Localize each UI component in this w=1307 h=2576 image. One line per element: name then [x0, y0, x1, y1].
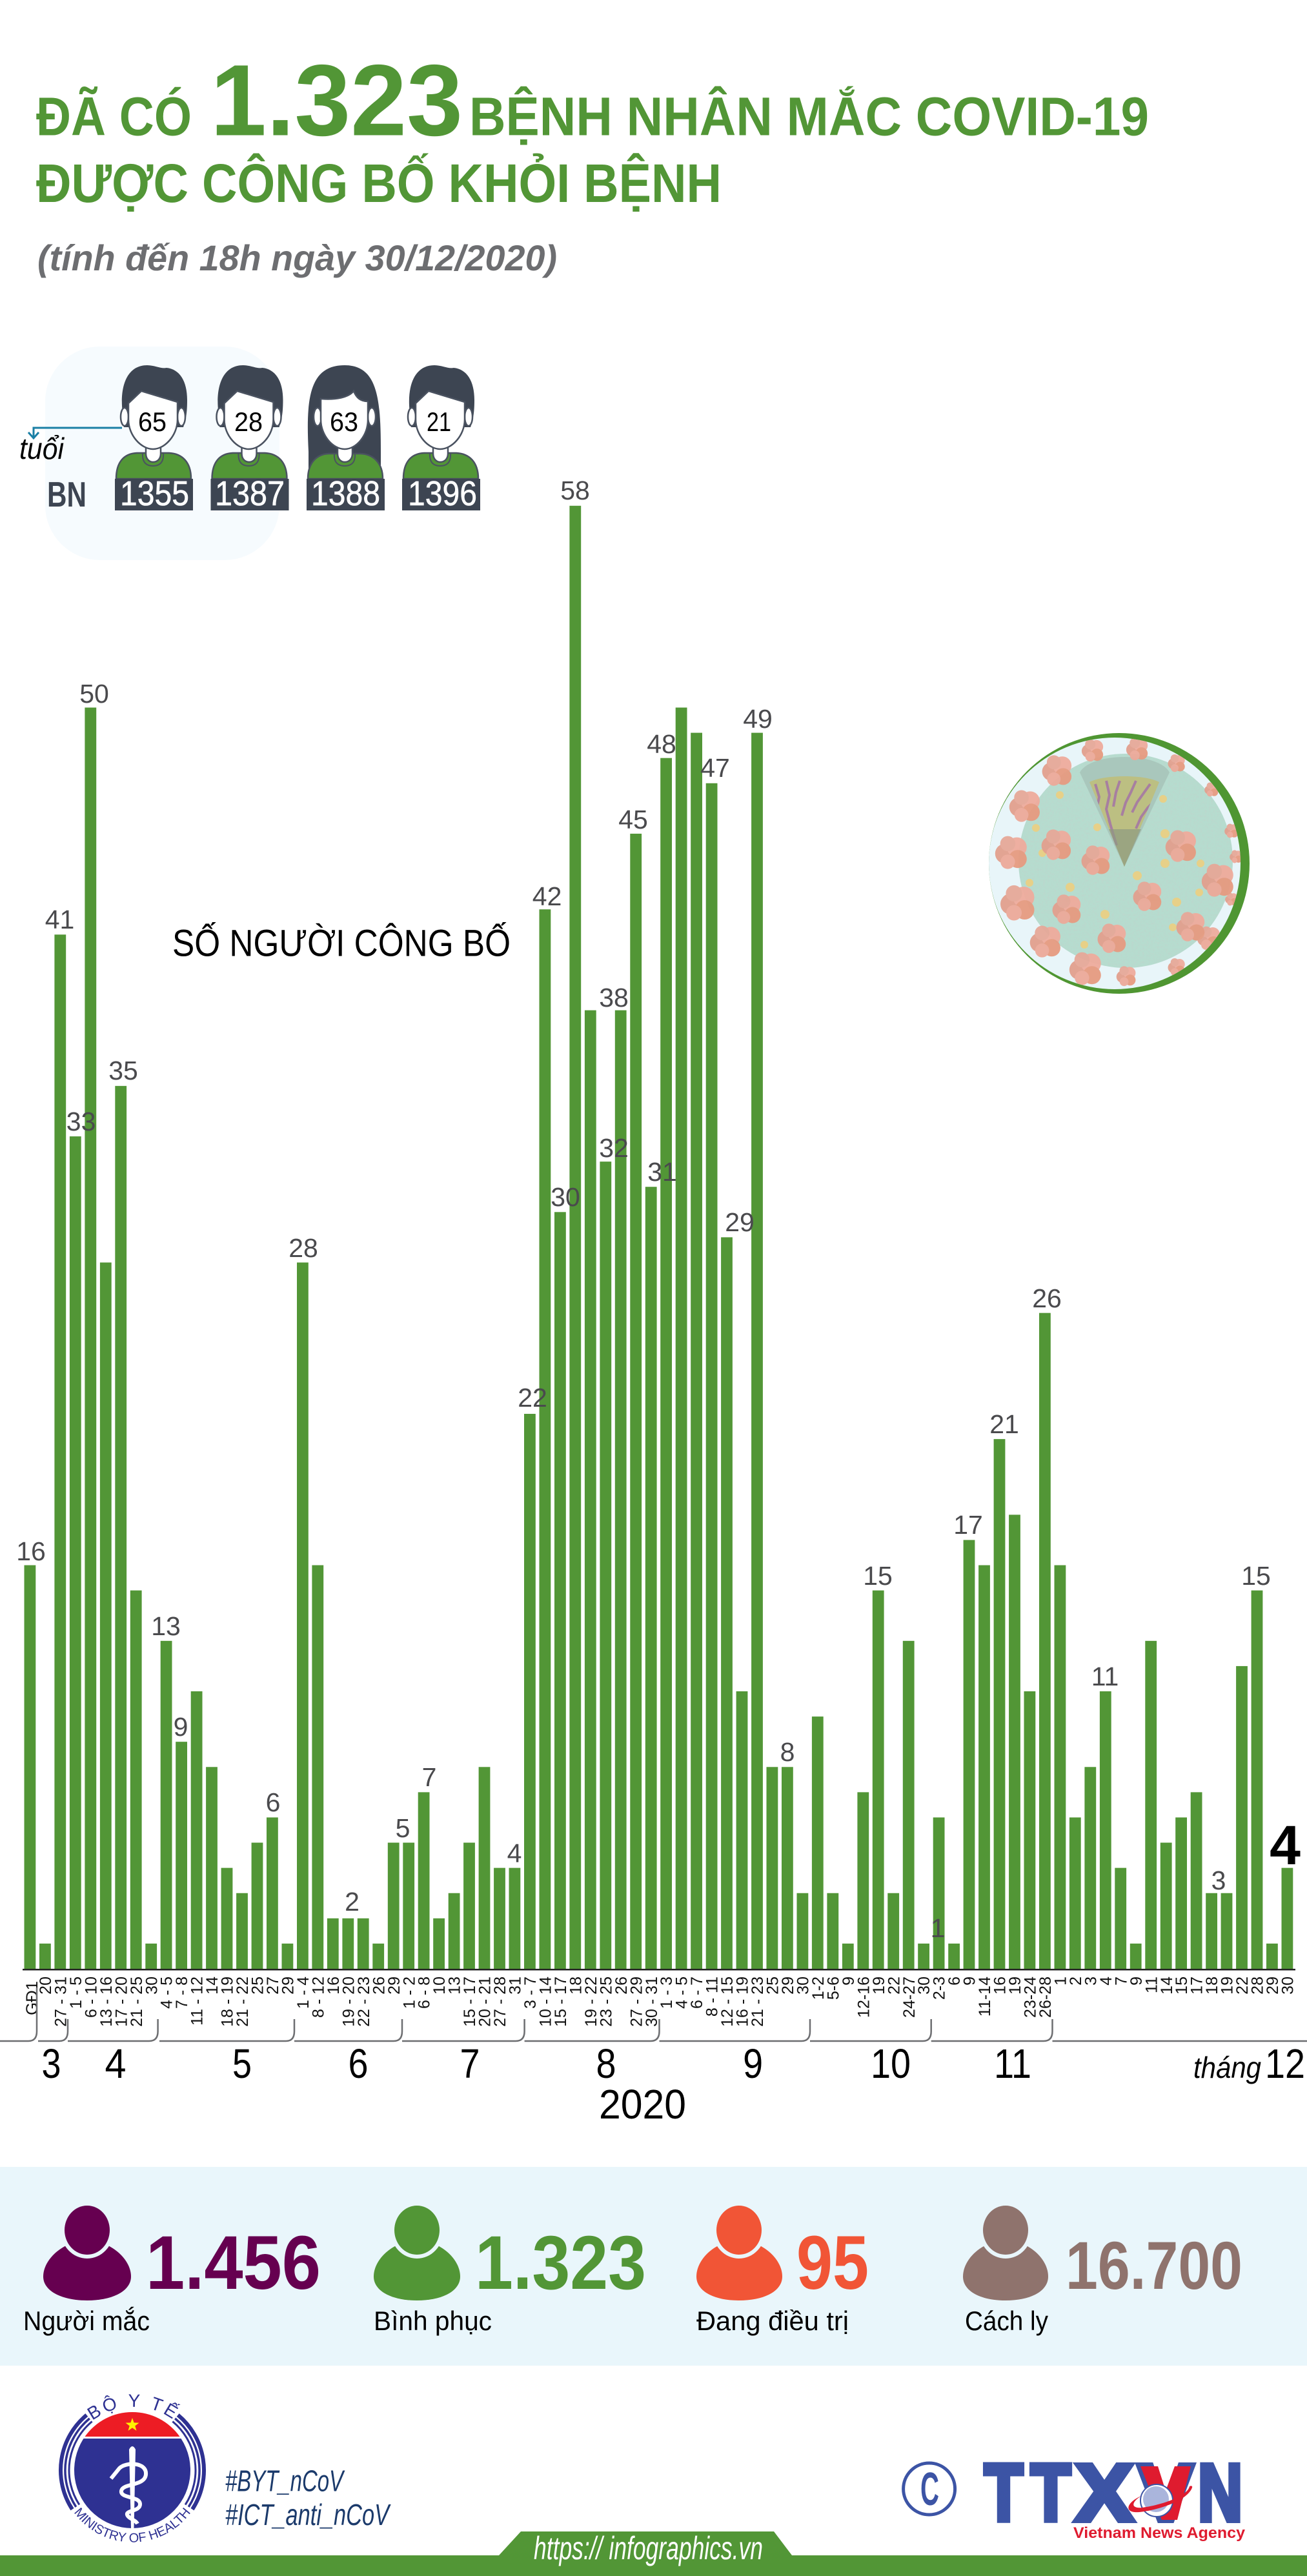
date axis labels: 26-28 — [1037, 1977, 1055, 2018]
date axis labels: 25 — [249, 1977, 267, 1995]
date axis labels: 15 — [1173, 1977, 1191, 1995]
latest value: 4: 4 — [1270, 1815, 1301, 1877]
date axis labels: 19 — [1006, 1977, 1024, 1995]
title: ĐÃ CÓ — [36, 86, 192, 147]
date axis labels: 1 - 4 — [294, 1977, 312, 2009]
date axis labels: 10 — [431, 1977, 449, 1995]
panel: patients — [19, 347, 480, 560]
panel: totals — [0, 2167, 1307, 2366]
patient 1387 — [210, 365, 289, 513]
bar value labels: 30 — [551, 1182, 580, 1212]
bar value labels: 21 — [989, 1409, 1019, 1439]
date axis labels: 21 - 22 — [234, 1977, 252, 2027]
month labels: 9 — [743, 2040, 763, 2087]
date axis labels: 21 - 23 — [749, 1977, 767, 2027]
date axis labels: 14 — [1158, 1977, 1176, 1995]
month labels: 5 — [232, 2040, 252, 2087]
bar value labels: 50 — [79, 679, 109, 709]
date axis labels: 27 — [264, 1977, 282, 1995]
label: BN: BN — [47, 474, 86, 514]
bar value labels: 6 — [266, 1787, 280, 1817]
bar value labels: 38 — [599, 983, 629, 1012]
date axis labels: 9 — [840, 1977, 858, 1986]
bar value labels: 17 — [953, 1510, 983, 1540]
date axis labels: 6 - 10 — [82, 1977, 100, 2018]
date axis labels: 24-27 — [900, 1977, 918, 2018]
logo: TTXVN: T — [1031, 2448, 1071, 2538]
date axis labels: 31 — [506, 1977, 524, 1995]
stat: người mắc: Người mắc — [23, 2306, 150, 2336]
date axis labels: 28 — [1249, 1977, 1267, 1995]
hashtags: #BYT_nCoV — [225, 2464, 345, 2498]
date axis labels: 15 - 17 — [461, 1977, 479, 2027]
bar value labels: 13 — [151, 1611, 181, 1641]
stat: cách ly: 16.700 — [1066, 2228, 1242, 2304]
date axis labels: 1-2 — [809, 1977, 827, 2000]
month labels — [41, 2040, 1305, 2128]
logo: TTXVN: T — [984, 2448, 1023, 2538]
label: chart caption: SỐ NGƯỜI CÔNG BỐ — [172, 923, 511, 964]
date axis labels: 19 — [1219, 1977, 1237, 1995]
date axis labels: 23 - 25 — [597, 1977, 615, 2027]
month brackets — [0, 1987, 1307, 2041]
bar value labels: 26 — [1032, 1283, 1062, 1313]
date axis labels: 23-24 — [1021, 1977, 1039, 2018]
bar value labels: 48 — [647, 729, 676, 759]
date axis labels: 29 — [385, 1977, 403, 1995]
date axis labels: 1 - 2 — [400, 1977, 418, 2009]
logo: TTXVN: N — [1198, 2448, 1242, 2538]
bar value labels: 49 — [743, 704, 773, 734]
logo: ministry of health: MINISTRY OF HEALTH — [74, 2508, 190, 2542]
month labels: 4 — [105, 2040, 127, 2087]
patient 1396 — [402, 365, 480, 513]
month labels: 7 — [460, 2040, 480, 2087]
stat: cách ly: Cách ly — [965, 2306, 1048, 2336]
date axis labels: 18 - 19 — [219, 1977, 237, 2027]
bar value labels: 5 — [396, 1813, 410, 1843]
patient 1388: 1388 — [311, 474, 380, 513]
patient 1396: 21 — [427, 407, 451, 437]
date axis labels: 14 — [203, 1977, 221, 1995]
date axis labels: 27 - 29 — [627, 1977, 645, 2027]
logo: TTXVN: V — [1138, 2448, 1193, 2538]
date axis labels: GĐ1 — [23, 1981, 41, 2015]
bar value labels: 33 — [66, 1107, 96, 1136]
date axis labels: 30 — [794, 1977, 812, 1995]
date axis labels: 11 - 12 — [188, 1977, 207, 2026]
date axis labels: 19 — [870, 1977, 888, 1995]
stat: bình phục: 1.323 — [475, 2220, 646, 2306]
date axis labels: 10 - 14 — [537, 1977, 555, 2027]
date axis labels: 1 - 5 — [67, 1977, 85, 2009]
logo: TTXVN: X — [1075, 2448, 1133, 2538]
date axis labels: 17 - 20 — [112, 1977, 130, 2027]
month labels: 11 — [994, 2040, 1031, 2087]
date axis labels: 2-3 — [931, 1977, 949, 2000]
date axis labels: 26 — [370, 1977, 388, 1995]
month labels: 6 — [349, 2040, 368, 2087]
date axis labels: 30 — [915, 1977, 933, 1995]
date axis labels: 6 - 8 — [416, 1977, 434, 2009]
bar value labels: 47 — [700, 753, 730, 783]
date axis labels: 20 - 21 — [476, 1977, 494, 2027]
bar value labels: 41 — [45, 905, 74, 934]
date axis labels: 11-14 — [976, 1977, 994, 2017]
date axis labels: 8 - 11 — [704, 1977, 722, 2017]
date axis labels: 5-6 — [824, 1977, 842, 2000]
date axis labels: 2 — [1067, 1977, 1085, 1986]
totals background — [0, 2167, 1307, 2366]
hashtags: #ICT_anti_nCoV — [225, 2498, 391, 2531]
title: BỆNH NHÂN MẮC COVID-19 — [469, 86, 1149, 147]
patient 1355: 1355 — [120, 474, 189, 513]
date axis labels: 30 — [1279, 1977, 1297, 1995]
stat: bình phục: Bình phục — [374, 2306, 492, 2336]
footer band — [0, 2530, 1307, 2576]
bar value labels: 35 — [108, 1056, 138, 1085]
stat: đang điều trị — [696, 2202, 869, 2336]
bar value labels: 28 — [289, 1233, 318, 1263]
bar value labels: 15 — [863, 1561, 893, 1591]
date axis labels: 6 — [946, 1977, 964, 1986]
bar value labels: 3 — [1211, 1866, 1226, 1895]
date axis labels: 12-16 — [855, 1977, 873, 2018]
patient 1387: 1387 — [215, 474, 285, 513]
date axis labels: 7 - 8 — [173, 1977, 191, 2009]
stat: cách ly — [963, 2202, 1242, 2336]
date axis labels: 6 - 7 — [688, 1977, 706, 2009]
chart axis — [23, 1969, 1295, 1971]
date axis labels: 16 - 19 — [734, 1977, 752, 2027]
date axis labels: 9 — [1128, 1977, 1146, 1986]
date axis labels: 30 - 31 — [643, 1977, 661, 2027]
stat: người mắc — [23, 2202, 321, 2336]
footer band: https:// infographics.vn — [534, 2530, 763, 2566]
patient 1388 — [307, 365, 385, 513]
bar chart — [25, 506, 1293, 1969]
patient 1396: 1396 — [408, 474, 477, 513]
date axis labels: 29 — [779, 1977, 797, 1995]
date axis labels: 11 — [1142, 1977, 1160, 1993]
date axis labels: 18 — [567, 1977, 585, 1995]
date axis labels: 4 - 5 — [673, 1977, 691, 2009]
bar value labels: 45 — [618, 805, 648, 834]
stat: đang điều trị: Đang điều trị — [696, 2306, 849, 2336]
bar value labels: 9 — [174, 1712, 188, 1742]
illustration: coronavirus — [989, 733, 1250, 994]
panel background — [45, 347, 279, 560]
month labels: 2020 — [599, 2081, 686, 2128]
patient 1355: 65 — [138, 407, 167, 437]
bar value labels: 29 — [725, 1207, 755, 1237]
stat: đang điều trị: 95 — [796, 2220, 869, 2306]
date axis labels: 22 — [885, 1977, 903, 1995]
date axis labels: 4 — [1097, 1977, 1115, 1986]
date axis labels: 22 — [1233, 1977, 1251, 1995]
date axis labels: 30 — [143, 1977, 161, 1995]
patient 1387: 28 — [234, 407, 263, 437]
date axis labels: 29 — [279, 1977, 297, 1995]
date axis labels: 1 - 3 — [658, 1977, 676, 2009]
logo: TTXVN: Vietnam News Agency — [1073, 2524, 1246, 2542]
title: 1.323 — [210, 44, 463, 157]
month labels: 8 — [596, 2040, 616, 2087]
label: tháng: tháng — [1193, 2051, 1261, 2084]
bar value labels: 2 — [345, 1887, 360, 1917]
date axis labels: 13 - 16 — [97, 1977, 116, 2027]
date axis labels: 27 - 31 — [52, 1977, 70, 2027]
date axis labels: 25 — [764, 1977, 782, 1995]
date axis labels: 20 — [37, 1977, 55, 1995]
date axis labels: 3 - 7 — [522, 1977, 540, 2009]
date axis labels: 19 - 20 — [339, 1977, 358, 2027]
bar value labels: 4 — [507, 1838, 522, 1868]
date axis labels: 27 - 28 — [491, 1977, 509, 2027]
date axis labels: 18 — [1203, 1977, 1221, 1995]
bar value labels: 1 — [931, 1913, 945, 1943]
month labels: 10 — [871, 2040, 911, 2087]
label: tuổi: tuổi — [19, 432, 65, 465]
subtitle: (tính đến 18h ngày 30/12/2020) — [37, 237, 557, 278]
stat: người mắc: 1.456 — [146, 2220, 321, 2306]
hashtags — [225, 2464, 391, 2531]
bar value labels: 58 — [560, 476, 590, 505]
date axis labels: 9 — [961, 1977, 979, 1986]
date axis labels: 17 — [1188, 1977, 1206, 1995]
bar value labels: 7 — [422, 1762, 436, 1792]
stat: bình phục — [374, 2202, 646, 2336]
bar value labels: 8 — [780, 1737, 795, 1767]
date axis labels: 8 - 12 — [309, 1977, 327, 2018]
date axis labels: 16 — [325, 1977, 343, 1995]
logo: ministry of health — [58, 2394, 207, 2542]
bar value labels: 42 — [532, 881, 562, 911]
date axis labels: 1 — [1052, 1977, 1070, 1986]
bar value labels: 15 — [1241, 1561, 1271, 1591]
date axis labels: 29 — [1264, 1977, 1282, 1995]
month labels: 3 — [41, 2040, 61, 2087]
date axis labels: 26 — [613, 1977, 631, 1995]
date axis labels — [23, 1977, 1297, 2027]
date axis labels: 3 — [1082, 1977, 1100, 1986]
date axis labels: 7 — [1112, 1977, 1130, 1986]
bar value labels: 16 — [16, 1536, 46, 1566]
patient 1388: 63 — [330, 407, 358, 437]
title — [36, 44, 1149, 214]
bar value labels: 32 — [599, 1133, 629, 1163]
bar value labels: 11 — [1091, 1662, 1119, 1691]
bar value labels: 31 — [647, 1157, 677, 1187]
date axis labels: 22 - 23 — [355, 1977, 373, 2027]
date axis labels: 16 — [991, 1977, 1009, 1995]
logo: TTXVN: C — [920, 2464, 939, 2515]
bar value labels — [16, 476, 1271, 1943]
logo: TTXVN — [904, 2448, 1246, 2542]
bar value labels: 22 — [518, 1383, 547, 1413]
logo: ministry of health: BỘ Y TẾ — [86, 2394, 181, 2420]
date axis labels: 21 - 25 — [128, 1977, 146, 2027]
date axis labels: 13 — [446, 1977, 464, 1995]
date axis labels: 19 - 22 — [582, 1977, 600, 2027]
date axis labels: 12 - 15 — [718, 1977, 736, 2027]
title: ĐƯỢC CÔNG BỐ KHỎI BỆNH — [36, 153, 722, 214]
date axis labels: 15 - 17 — [552, 1977, 570, 2027]
patient 1355 — [115, 365, 193, 513]
date axis labels: 4 - 5 — [158, 1977, 176, 2009]
arrow: age pointer — [28, 428, 122, 438]
